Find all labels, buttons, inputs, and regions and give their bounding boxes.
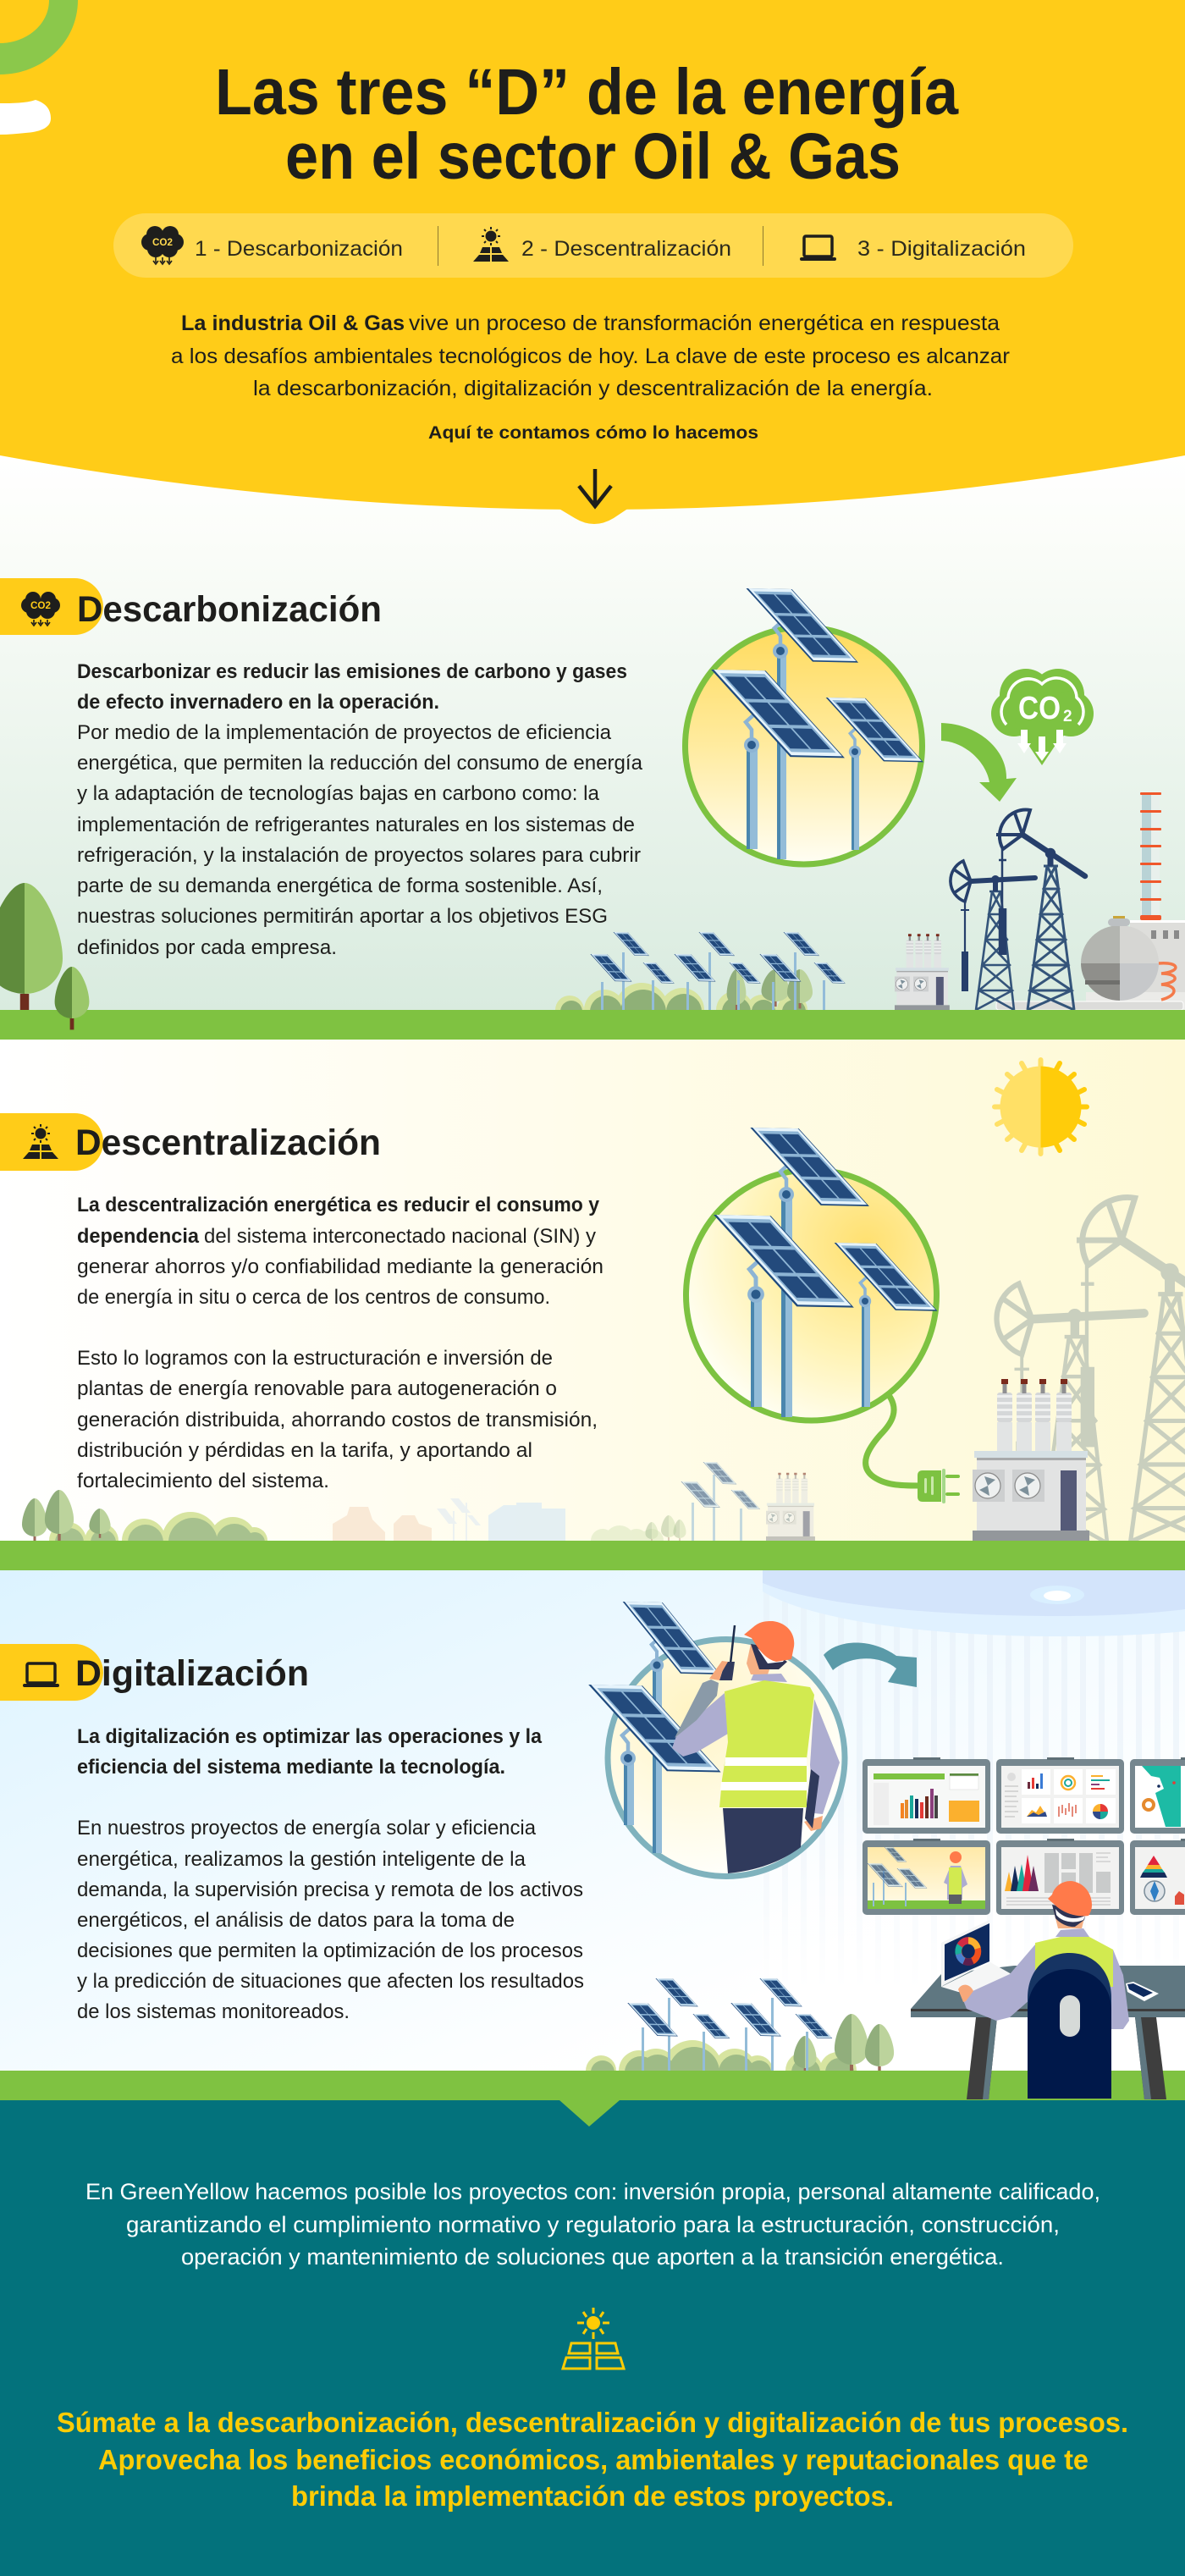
illustration: small faded solar and transformer <box>681 1462 815 1541</box>
illustration: plant building and tank <box>996 916 1185 1010</box>
intro paragraph: la descarbonización, digitalización y descentralización de la energía. <box>253 377 933 400</box>
icon: sun and panels outline <box>563 2308 624 2369</box>
decorative green ring <box>0 0 78 74</box>
heading: Descentralización <box>75 1123 381 1163</box>
body text: energética, que permiten la reducción del consumo de energía <box>77 752 643 775</box>
illustration: faded oil pumps <box>997 1198 1185 1543</box>
heading badge <box>0 1113 381 1171</box>
call to action: Súmate a la descarbonización, descentralización y digitalización de tus procesos. <box>57 2408 1128 2439</box>
monitor: map <box>1130 1757 1185 1834</box>
icon: sun and solar panel <box>23 1124 58 1159</box>
illustration: bushes and trees <box>22 1490 267 1569</box>
section background: descarbonización <box>0 455 1185 1010</box>
body text: En nuestros proyectos de energía solar y eficiencia <box>77 1817 537 1840</box>
heading badge <box>0 1644 309 1701</box>
illustration: large transformer <box>973 1379 1089 1541</box>
illustration: worker in circle <box>588 1602 845 1876</box>
body text: energéticos, el análisis de datos para la toma de <box>77 1909 515 1932</box>
label: item 2: 2 - Descentralización <box>521 237 731 261</box>
illustration: small solar array <box>627 1978 832 2071</box>
body text: energética, realizamos la gestión inteligente de la <box>77 1848 526 1871</box>
body text: Esto lo logramos con la estructuración e inversión de <box>77 1347 553 1370</box>
body text: generar ahorros y/o confiabilidad mediante la generación <box>77 1255 604 1278</box>
call to action: brinda la implementación de estos proyectos. <box>291 2481 894 2513</box>
intro paragraph <box>171 312 1010 400</box>
arrow down <box>579 469 611 506</box>
ceiling <box>763 1570 1185 1636</box>
title: en el sector Oil & Gas <box>285 120 901 193</box>
label: item 3: 3 - Digitalización <box>857 237 1026 261</box>
icon: laptop <box>800 236 836 261</box>
call to read: Aquí te contamos cómo lo hacemos <box>428 423 758 443</box>
panel: descentralización <box>0 1060 1185 1570</box>
yellow banner <box>0 0 1185 510</box>
body text: implementación de refrigerantes naturales en los sistemas de <box>77 814 635 836</box>
heading: Descarbonización <box>77 589 382 630</box>
section background: descentralización <box>0 1040 1185 1541</box>
body text: de los sistemas monitoreados. <box>77 2000 350 2023</box>
body text: plantas de energía renovable para autogeneración o <box>77 1377 557 1400</box>
navigation pill <box>113 213 1073 278</box>
closing paragraph: En GreenYellow hacemos posible los proyectos con: inversión propia, personal altamente calificado, <box>85 2179 1100 2204</box>
body text: eficiencia del sistema mediante la tecnología. <box>77 1756 505 1779</box>
illustration: transformer <box>895 934 950 1010</box>
section background: digitalización <box>0 1570 1185 2071</box>
chair <box>1028 1953 1111 2099</box>
decorative white blob <box>0 100 51 135</box>
illustration: solar panels in circle <box>686 588 923 864</box>
panel: closing <box>0 2100 1185 2576</box>
green pointer <box>559 2100 620 2126</box>
monitor: bar chart <box>863 1757 990 1834</box>
ground strip <box>0 1541 1185 1570</box>
monitor: dashboard tiles <box>996 1757 1124 1834</box>
panel: header <box>0 0 1185 524</box>
title <box>215 56 959 193</box>
laptop <box>941 1920 1011 1995</box>
body text: refrigeración, y la instalación de proyectos solares para cubrir <box>77 844 641 867</box>
body text: generación distribuida, ahorrando costos de transmisión, <box>77 1409 598 1431</box>
arrow: teal curved <box>824 1642 917 1687</box>
illustration: green cable and plug <box>866 1395 960 1503</box>
illustration: bushes <box>555 969 813 1037</box>
closing paragraph: operación y mantenimiento de soluciones que aporten a la transición energética. <box>181 2244 1004 2270</box>
ground strip <box>0 1010 1185 1040</box>
illustration: faded town and solar <box>333 1498 686 1556</box>
body text: de efecto invernadero en la operación. <box>77 691 439 714</box>
heading badge <box>0 578 382 635</box>
closing paragraph: garantizando el cumplimiento normativo y regulatorio para la estructuración, construcción, <box>126 2212 1060 2237</box>
body text: fortalecimiento del sistema. <box>77 1470 329 1492</box>
control room wall <box>763 1591 1185 1989</box>
icon: CO2 cloud <box>141 226 184 264</box>
body text: de energía in situ o cerca de los centros de consumo. <box>77 1286 550 1309</box>
monitor: pyramid chart <box>1130 1839 1185 1915</box>
icon: CO2 cloud large <box>991 669 1094 765</box>
tree: small <box>55 967 89 1029</box>
phone <box>1126 1982 1159 2001</box>
body text: demanda, la supervisión precisa y remota de los activos <box>77 1878 583 1901</box>
worker <box>672 1621 840 1873</box>
intro paragraph: a los desafíos ambientales tecnológicos de hoy. La clave de este proceso es alcanzar <box>171 345 1010 368</box>
body text <box>77 1725 584 2023</box>
icon: CO2 cloud large: 2 <box>1063 708 1072 725</box>
icon: CO2 cloud <box>21 592 60 626</box>
body text: definidos por cada empresa. <box>77 936 337 959</box>
icon: CO2 cloud large: CO <box>1018 691 1061 726</box>
body text: Por medio de la implementación de proyectos de eficiencia <box>77 721 612 744</box>
body text: y la predicción de situaciones que afecten los resultados <box>77 1970 584 1993</box>
body text: distribución y pérdidas en la tarifa, y aportando al <box>77 1439 532 1462</box>
monitor: peaks chart <box>996 1839 1124 1915</box>
call to action: Aprovecha los beneficios económicos, ambientales y reputacionales que te <box>98 2445 1089 2476</box>
body text: decisiones que permiten la optimización de los procesos <box>77 1939 583 1962</box>
label: item 1: 1 - Descarbonización <box>195 237 403 261</box>
body text: del sistema interconectado nacional (SIN) y <box>204 1225 596 1248</box>
illustration: operator at desk <box>911 1881 1185 2099</box>
body text: La digitalización es optimizar las operaciones y la <box>77 1725 543 1748</box>
body text <box>77 1194 604 1492</box>
illustration: bushes and trees <box>586 2014 894 2101</box>
panel: descarbonización <box>0 578 1185 1040</box>
body text: Descarbonizar es reducir las emisiones de carbono y gases <box>77 660 627 683</box>
ground strip <box>0 2071 1185 2100</box>
illustration: oil pumps <box>951 810 1085 1010</box>
heading: Digitalización <box>75 1653 309 1694</box>
body text: dependencia <box>77 1225 200 1248</box>
body text: nuestras soluciones permitirán aportar a los objetivos ESG <box>77 905 608 928</box>
title: Las tres “D” de la energía <box>215 56 959 129</box>
call to action <box>57 2408 1128 2513</box>
closing paragraph <box>85 2179 1100 2270</box>
banner tab <box>558 508 629 524</box>
icon: sun <box>995 1060 1087 1154</box>
icon: laptop <box>23 1663 59 1687</box>
body text: parte de su demanda energética de forma sostenible. Así, <box>77 874 603 897</box>
intro paragraph: La industria Oil & Gas <box>181 312 405 335</box>
teal background <box>0 2100 1185 2576</box>
icon: sun and solar panel <box>473 227 509 262</box>
illustration: small solar array <box>590 932 846 1010</box>
illustration: chimney <box>1140 792 1161 920</box>
illustration: solar panels in circle <box>686 1128 938 1420</box>
body text <box>77 660 643 959</box>
operator <box>958 1881 1129 2029</box>
body text: La descentralización energética es reducir el consumo y <box>77 1194 600 1216</box>
arrow: green curved <box>941 723 1017 802</box>
tree: large <box>0 883 63 1018</box>
icon: CO2 cloud: CO2 <box>30 599 51 611</box>
monitor: solar scene <box>863 1839 990 1915</box>
icon: CO2 cloud: CO2 <box>152 236 173 248</box>
panel: digitalización <box>0 1570 1185 2101</box>
body text: y la adaptación de tecnologías bajas en carbono como: la <box>77 782 600 805</box>
intro paragraph: vive un proceso de transformación energética en respuesta <box>409 312 1000 335</box>
